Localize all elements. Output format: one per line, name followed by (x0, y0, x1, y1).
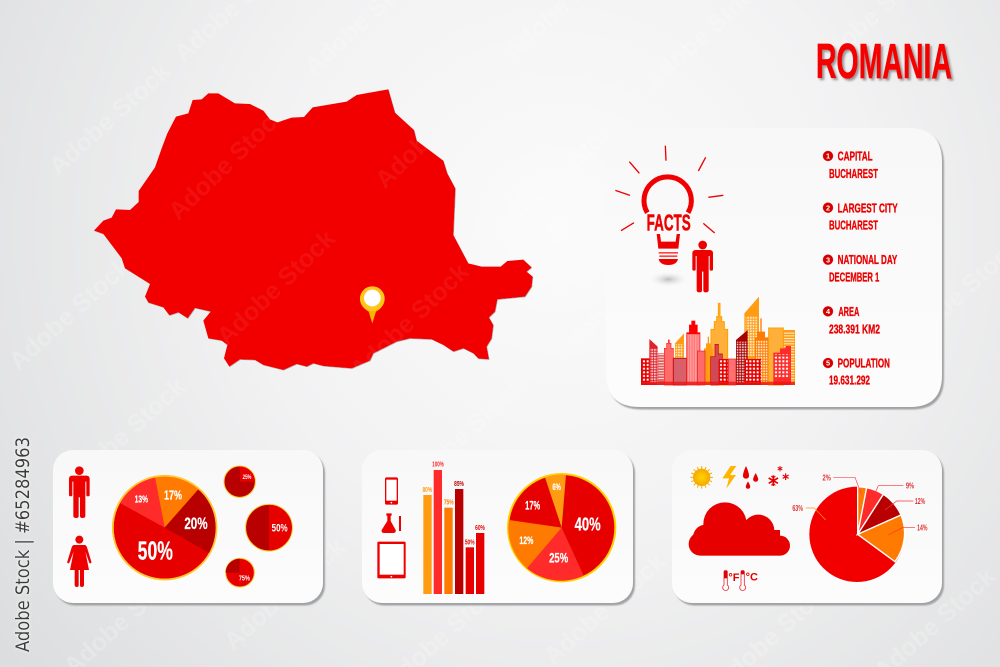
pie chart: 25% (224, 466, 255, 497)
bar chart: 85% (454, 479, 464, 488)
icon: lightning (722, 466, 736, 489)
icon: phone (385, 477, 398, 505)
fact: capital: CAPITAL (838, 149, 873, 164)
watermarks: Adobe Stock (219, 532, 351, 656)
fact: national day: 3 (826, 255, 830, 264)
fact: area: 238.391 KM2 (829, 321, 880, 336)
pie chart: main: 50% (138, 536, 173, 566)
pie chart: climate: 2% (822, 473, 831, 483)
icon: tablet (377, 542, 406, 578)
fact: area: 4 (826, 307, 831, 316)
icon: thermometers: °C (746, 572, 758, 584)
pie chart: technology: 17% (525, 498, 540, 512)
map watermarks: Adobe Stock (370, 68, 499, 194)
pie chart: main: 20% (184, 514, 208, 533)
pie chart: technology: 40% (575, 513, 601, 534)
fact: largest city (823, 200, 898, 233)
stock id vertical text: Adobe Stock | #65284963 (12, 437, 34, 652)
pie chart: 50% (246, 504, 292, 551)
fact: national day (823, 252, 897, 284)
pie chart: technology: 6% (552, 482, 561, 492)
fact: national day: NATIONAL DAY (838, 252, 897, 267)
icon: thermometers: °F (728, 572, 740, 584)
watermarks: Adobe Stock (499, 107, 631, 231)
fact: largest city: BUCHAREST (829, 218, 878, 233)
bar chart: 100% (432, 460, 444, 469)
pie chart: main: 13% (135, 494, 148, 505)
pie chart: technology: 12% (519, 535, 533, 547)
pie chart: technology: 25% (549, 549, 569, 565)
icon: rain drops (743, 466, 758, 489)
map watermarks: Adobe Stock (163, 99, 292, 226)
map watermarks: Adobe Stock (345, 258, 474, 384)
watermarks: Adobe Stock (399, 372, 531, 496)
bar chart: 75% (444, 498, 454, 507)
pie chart: climate: 12% (915, 496, 926, 506)
icon: snowflakes (769, 466, 789, 486)
location pin (360, 286, 385, 323)
bar chart: 50% (465, 537, 475, 546)
panel: technology (362, 450, 633, 603)
pie chart: climate: 14% (917, 523, 928, 533)
fact: population: POPULATION (838, 355, 890, 370)
pie chart: climate: 9% (906, 481, 915, 491)
watermarks: Adobe Stock (59, 372, 191, 496)
pie chart: main: 17% (164, 488, 182, 503)
fact: area: AREA (838, 304, 860, 319)
bar chart (422, 460, 485, 594)
icon: cloud (689, 502, 790, 556)
icon: man (692, 241, 713, 292)
bar chart: 60% (475, 523, 485, 532)
fact: capital: 1 (826, 152, 830, 161)
icon: flask (382, 513, 401, 533)
fact: population: 5 (826, 359, 830, 368)
fact: capital (823, 149, 878, 181)
icon: facts light bulb (615, 146, 723, 292)
watermarks: Adobe Stock (539, 547, 671, 667)
pie chart: 75% (226, 558, 254, 587)
facts list (823, 149, 898, 388)
map watermarks (163, 68, 499, 384)
fact: population (823, 355, 890, 388)
pie chart: technology (507, 473, 616, 582)
watermarks: Adobe Stock (4, 252, 136, 376)
icon: man (69, 466, 90, 518)
fact: area (823, 304, 880, 336)
fact: population: 19.631.292 (829, 373, 870, 388)
panel: climate (672, 450, 942, 603)
icon: woman (67, 536, 91, 587)
map watermarks: Adobe Stock (211, 224, 341, 351)
pie chart: 25%: 25% (243, 474, 251, 481)
icon: thermometers (723, 570, 758, 590)
fact: capital: BUCHAREST (829, 166, 878, 181)
bar chart: 80% (422, 485, 432, 494)
panel: facts (606, 128, 942, 407)
fact: national day: DECEMBER 1 (829, 269, 880, 284)
pie chart: 75%: 75% (239, 574, 250, 583)
pie chart: climate: 63% (792, 503, 803, 513)
pie chart: main (112, 475, 217, 580)
fact: largest city: 2 (826, 203, 830, 212)
skyline (641, 297, 795, 385)
map of Romania (94, 68, 533, 384)
icon: sun (690, 466, 713, 489)
watermarks: Adobe Stock (44, 57, 176, 181)
panel: demographics (53, 450, 323, 603)
pie chart: climate (792, 473, 928, 582)
watermarks: Adobe Stock (549, 242, 681, 366)
pie chart: 50%: 50% (272, 523, 288, 535)
fact: largest city: LARGEST CITY (838, 200, 898, 215)
icon: facts light bulb: FACTS (647, 210, 691, 236)
